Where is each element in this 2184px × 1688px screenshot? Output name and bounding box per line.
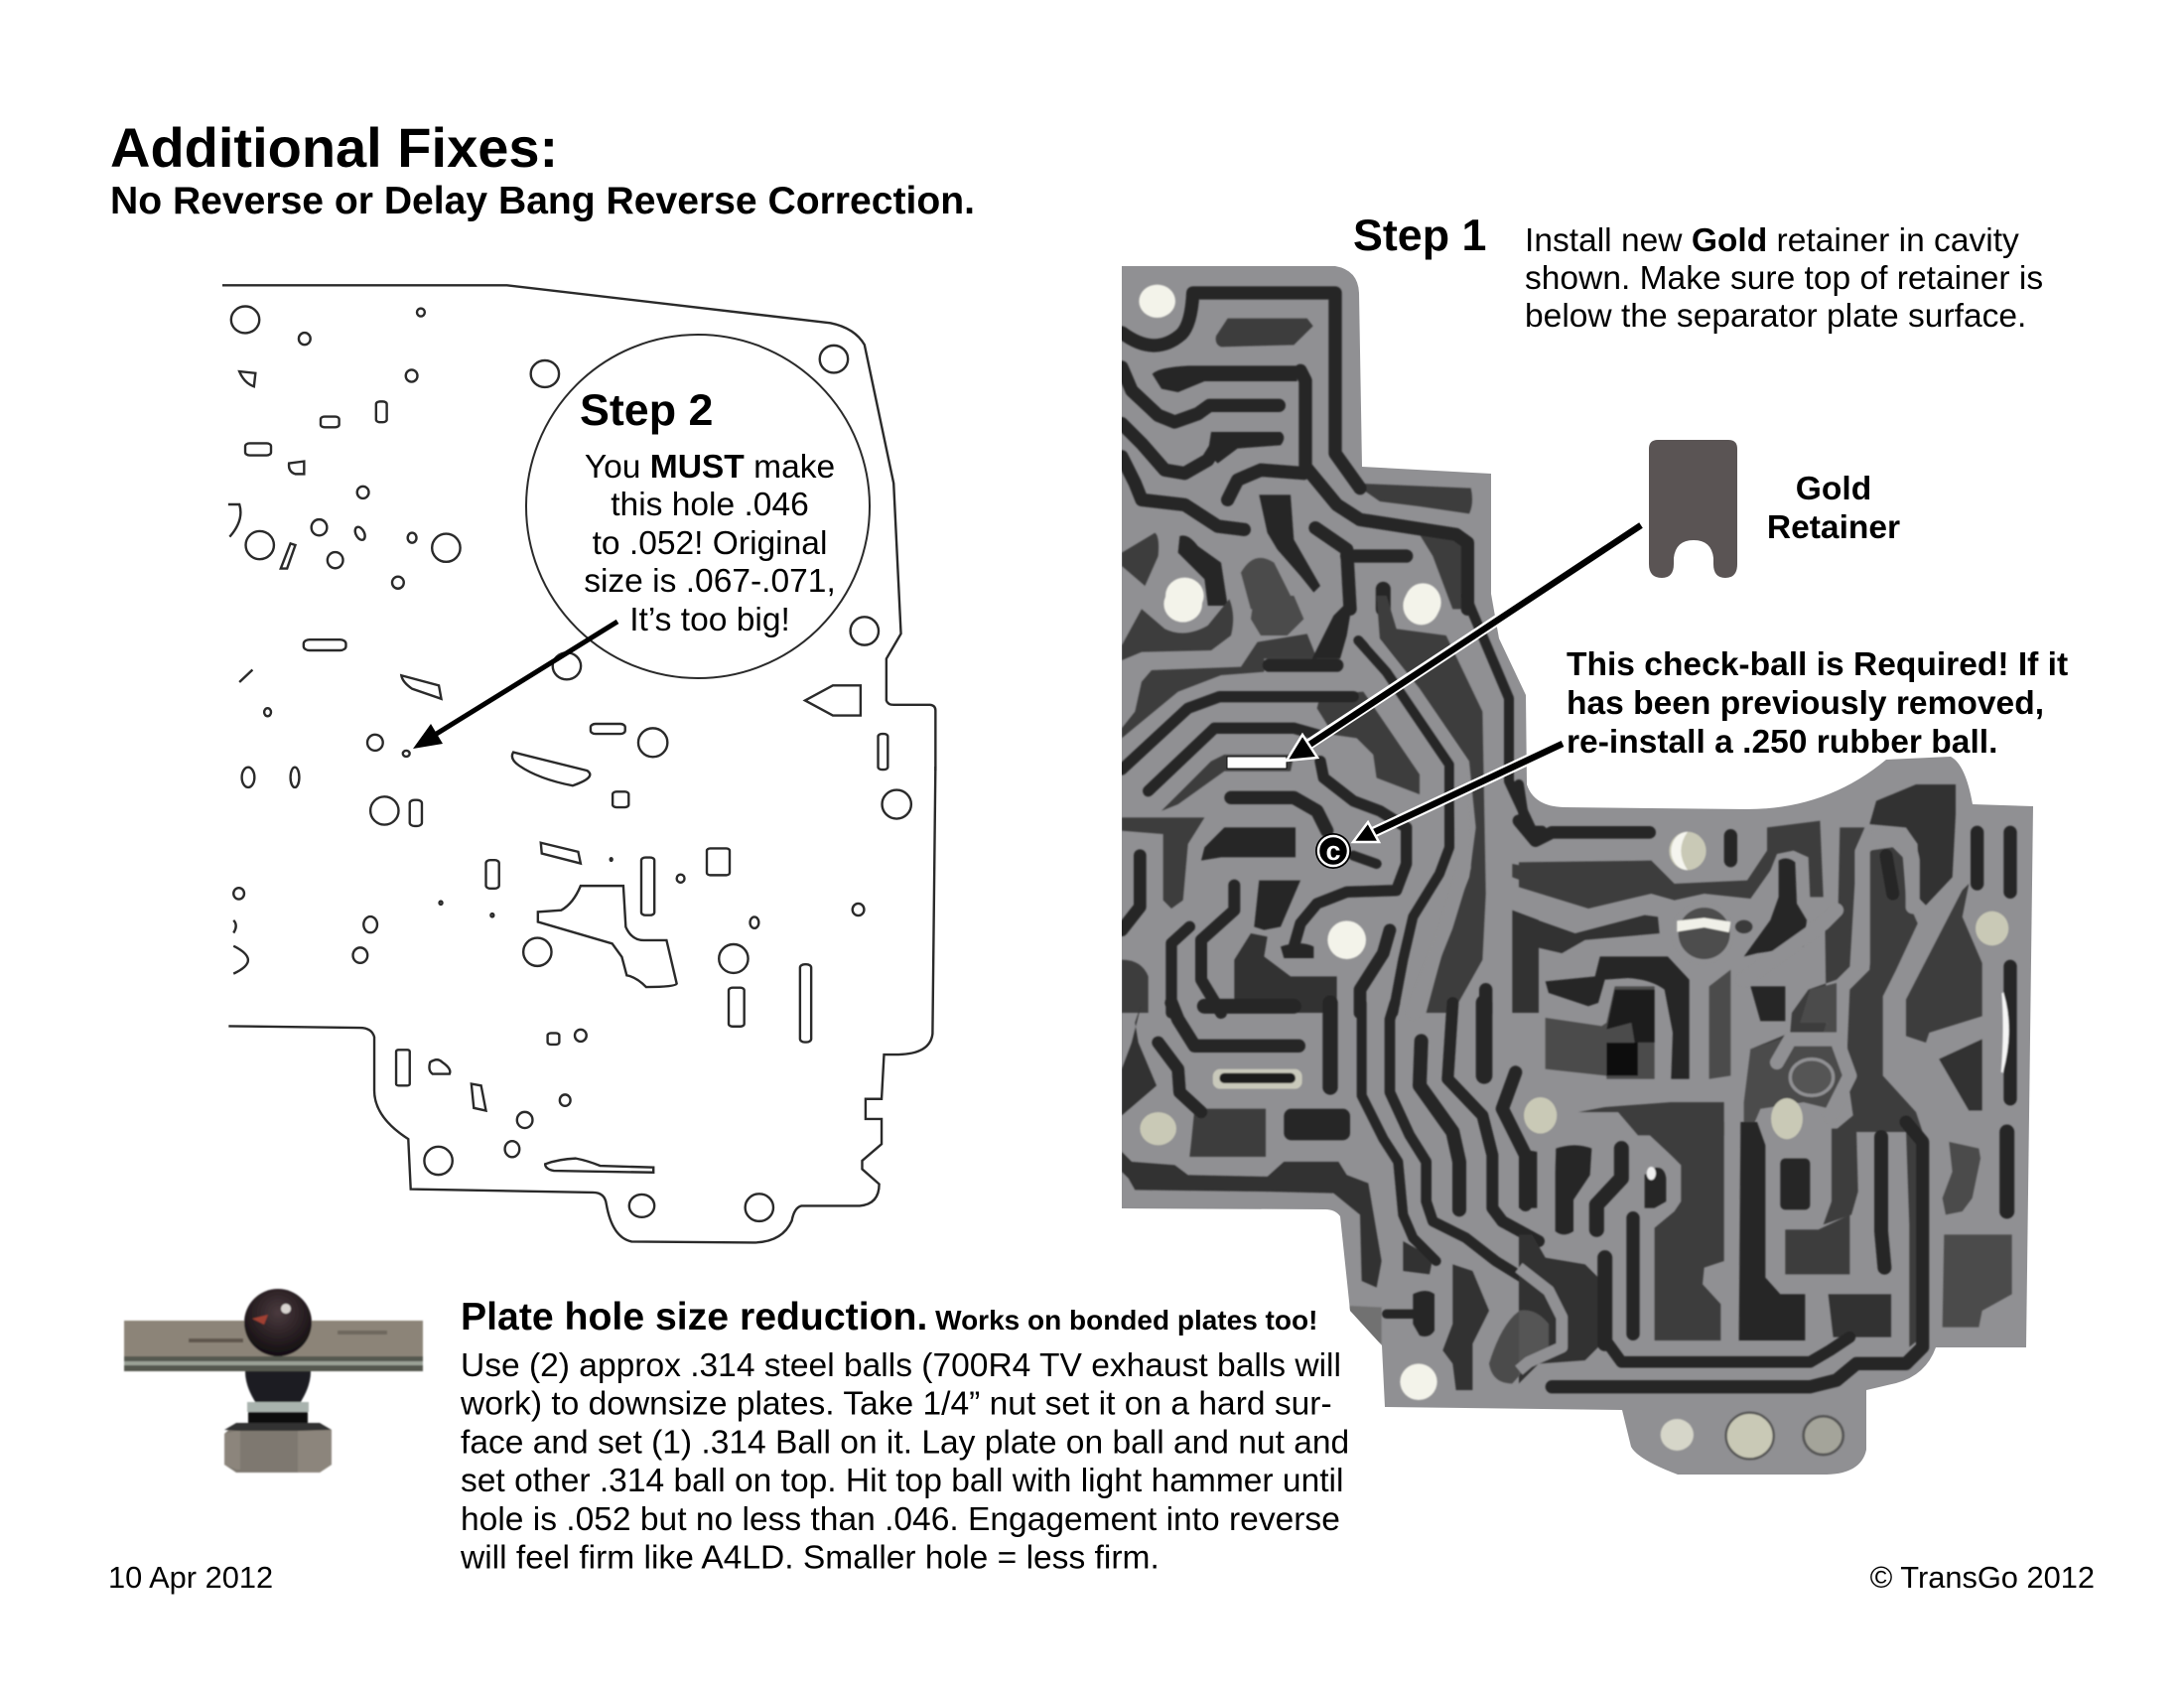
plate hole instructions: work) to downsize plates. Take 1/4” nut set it on a hard sur- — [460, 1386, 1332, 1423]
plate hole instructions: hole is .052 but no less than .046. Engagement into reverse — [461, 1501, 1340, 1538]
Step 2 text: this hole .046 — [611, 487, 809, 523]
plate hole instructions: will feel firm like A4LD. Smaller hole = less firm. — [460, 1539, 1160, 1577]
white retainer cavity marker — [1227, 757, 1287, 769]
Step 2 text: size is .067-.071, — [584, 563, 836, 600]
footer copyright: © TransGo 2012 — [1870, 1560, 2095, 1595]
Step 1 text: shown. Make sure top of retainer is — [1525, 260, 2043, 297]
gold retainer label: Retainer — [1767, 509, 1900, 546]
upper left channels — [1122, 285, 1472, 622]
Step 2 text: It’s too big! — [629, 602, 790, 638]
arrow: to retainer cavity — [1287, 525, 1641, 761]
arrow: to check ball — [1353, 744, 1563, 842]
Step 1 text: below the separator plate surface. — [1525, 298, 2026, 335]
Step 1 text: Install new Gold retainer in cavity — [1525, 222, 2019, 259]
Step 2 text: to .052! Original — [593, 525, 827, 562]
Step 2 text: You MUST make — [585, 449, 835, 486]
Step 2 callout circle — [526, 335, 870, 678]
lower left channels — [1122, 1003, 1552, 1400]
Step 2 heading: Step 2 — [580, 385, 713, 435]
plate hole instructions: face and set (1) .314 Ball on it. Lay plate on ball and nut and — [461, 1424, 1349, 1461]
heading: plate hole size reduction: Plate hole size reduction. Works on bonded plates too! — [461, 1296, 1317, 1338]
check-valve boss — [1672, 903, 1733, 964]
oval slot — [1213, 1069, 1302, 1089]
check-ball note: This check-ball is Required! If it — [1567, 646, 2068, 683]
plate hole instructions: Use (2) approx .314 steel balls (700R4 TV exhaust balls will — [461, 1347, 1341, 1384]
icon: gold retainer — [1649, 440, 1737, 578]
footer date: 10 Apr 2012 — [108, 1560, 273, 1595]
gasket plate outline diagram — [222, 285, 935, 1242]
title: Additional Fixes: — [110, 116, 558, 179]
lower right channels — [1519, 1122, 2012, 1459]
check-ball note: has been previously removed, — [1567, 685, 2044, 722]
photo: balls, plate and nut — [124, 1289, 423, 1473]
subtitle: No Reverse or Delay Bang Reverse Correction. — [110, 180, 975, 222]
arrow: to plate hole — [413, 622, 617, 749]
gold retainer label: Gold — [1796, 471, 1871, 507]
check-ball note: re-install a .250 rubber ball. — [1567, 724, 1997, 761]
middle left channels — [1122, 586, 1542, 1013]
Step 1 heading: Step 1 — [1353, 211, 1486, 260]
upper right channels — [1519, 784, 2010, 1139]
check ball symbol: c — [1325, 836, 1341, 866]
plate hole instructions: set other .314 ball on top. Hit top ball with light hammer until — [461, 1463, 1343, 1499]
check ball symbol — [1315, 833, 1351, 869]
valve body photo — [1112, 248, 2045, 1489]
